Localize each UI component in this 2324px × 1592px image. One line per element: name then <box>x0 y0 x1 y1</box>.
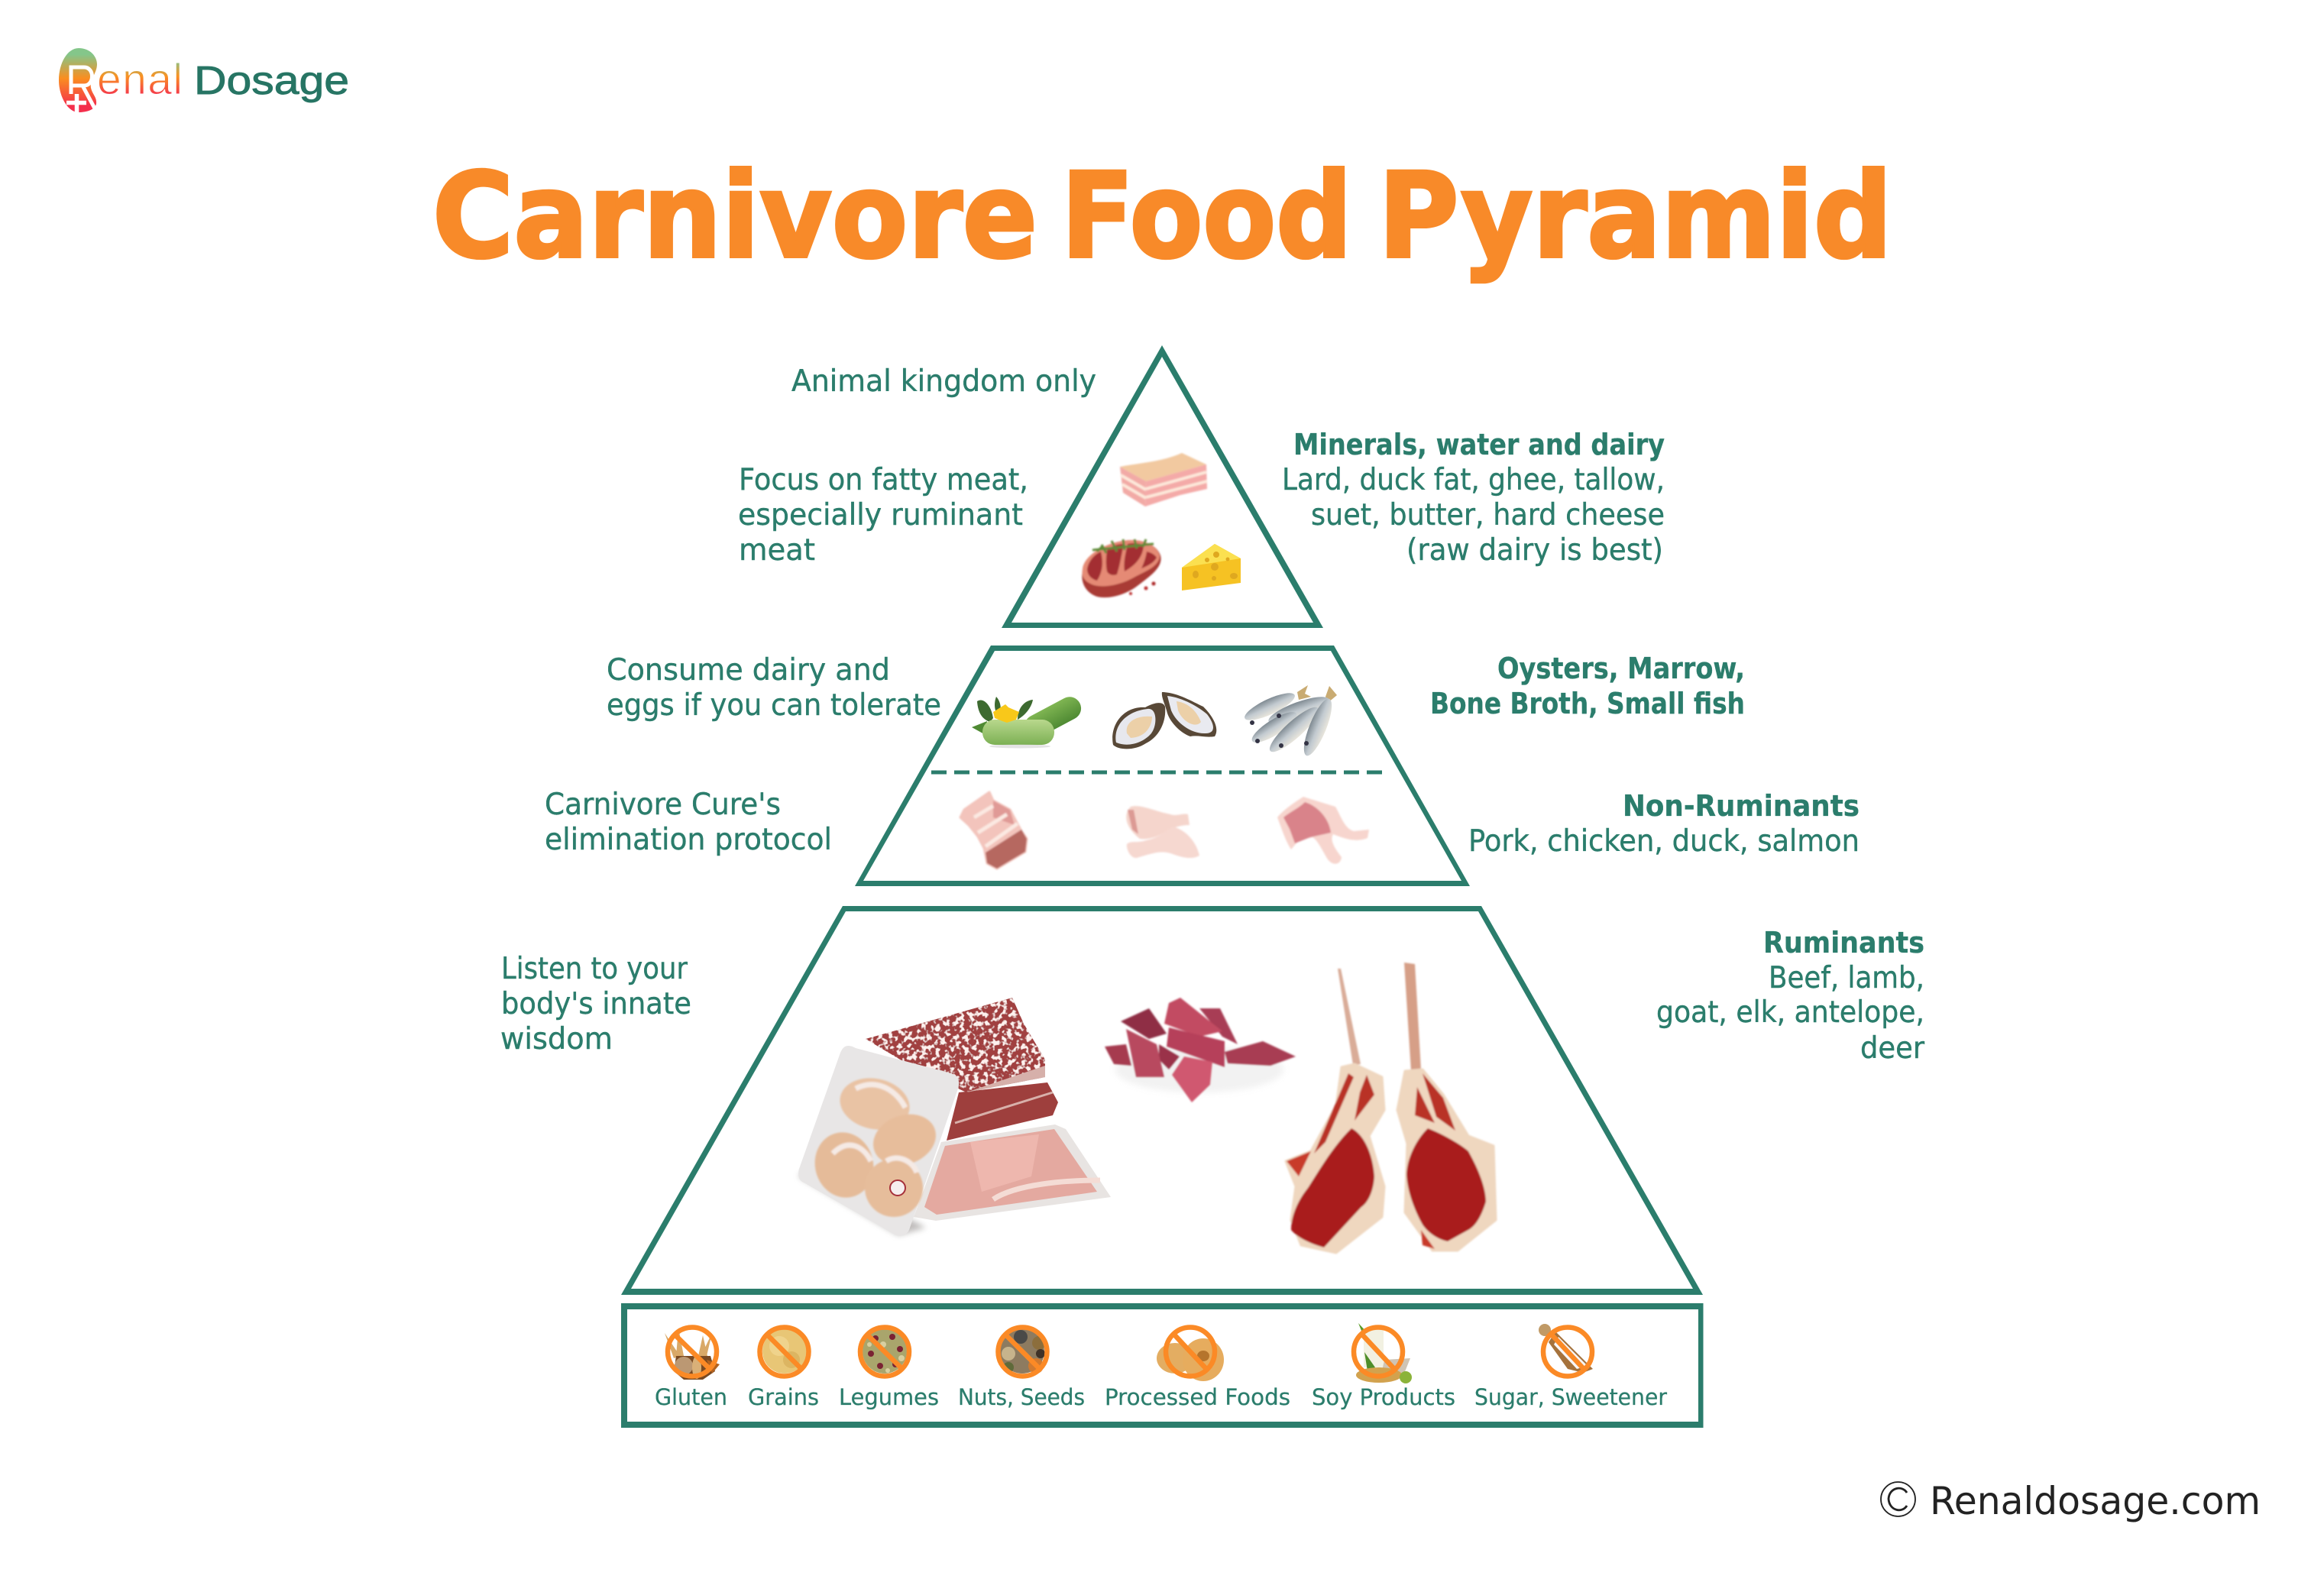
title: Carnivore <box>432 148 1037 285</box>
left note: elimination protocol <box>545 788 832 857</box>
avoid item: soy products <box>1312 1323 1455 1410</box>
right note: non-ruminants: Non-Ruminants <box>1623 789 1860 823</box>
footer copyright <box>1881 1479 2261 1523</box>
frozen chunks <box>808 1072 943 1217</box>
tier divider <box>931 770 1382 775</box>
food: pork belly <box>960 792 1027 869</box>
logo word: Dosage: Dosage <box>194 59 349 103</box>
right note: ruminants: goat, elk, antelope, <box>1656 995 1924 1030</box>
title <box>432 148 1892 285</box>
food: zucchini with flower <box>972 693 1085 749</box>
left note: fatty meat <box>738 463 1028 568</box>
avoid item: legumes <box>839 1328 939 1410</box>
label: Soy Products <box>1312 1384 1455 1410</box>
left note: innate wisdom: Listen to your <box>501 952 688 986</box>
left note: dairy and eggs: Consume dairy and <box>607 653 890 688</box>
label: Sugar, Sweetener <box>1474 1384 1667 1410</box>
avoid list frame <box>621 1303 1704 1428</box>
frozen block top <box>866 998 1045 1092</box>
left note: dairy and eggs <box>607 653 941 723</box>
avoid item: nuts and seeds <box>958 1328 1085 1410</box>
food: lamb chop right <box>1397 963 1496 1251</box>
pyramid tier: bottom trapezoid <box>621 906 1703 1295</box>
food: packaged frozen meat <box>798 998 1111 1236</box>
left note: fatty meat: meat <box>739 533 815 568</box>
right note: ruminants: deer <box>1860 1031 1925 1066</box>
left note: innate wisdom <box>500 952 691 1056</box>
left note: fatty meat: especially ruminant <box>738 498 1023 532</box>
label: Processed Foods <box>1105 1384 1290 1410</box>
right note: minerals, water and dairy: Lard, duck fat, ghee, tallow, <box>1282 463 1665 497</box>
right note: minerals, water and dairy: (raw dairy is best) <box>1406 533 1663 568</box>
left note: elimination protocol: Carnivore Cure's <box>545 788 781 822</box>
right note: non-ruminants <box>1468 789 1860 859</box>
right note: minerals, water and dairy <box>1282 428 1665 568</box>
food: duck leg <box>1277 797 1369 864</box>
right note: ruminants: Ruminants <box>1763 926 1924 959</box>
left note: fatty meat: Focus on fatty meat, <box>739 463 1028 497</box>
label: Gluten <box>655 1384 727 1410</box>
logo kidney mark <box>59 48 97 112</box>
right note: minerals, water and dairy: Minerals, water and dairy <box>1293 428 1665 461</box>
right note: ruminants: Beef, lamb, <box>1769 961 1924 995</box>
title: Pyramid <box>1378 148 1892 285</box>
logo: Renal Dosage <box>59 48 349 112</box>
upright tray <box>798 1046 959 1236</box>
left note: innate wisdom: wisdom <box>500 1022 613 1056</box>
right note: oysters, marrow <box>1430 652 1745 720</box>
label: Grains <box>748 1384 819 1410</box>
title: Food <box>1061 148 1352 285</box>
food: cheese wedge <box>1182 544 1241 591</box>
food: oysters <box>1112 692 1216 749</box>
avoid item: processed foods <box>1105 1328 1290 1410</box>
logo word: enal: enal <box>97 55 183 104</box>
pyramid tier: middle trapezoid <box>855 646 1470 886</box>
pyramid tier: top triangle <box>1002 345 1323 628</box>
copyright symbol <box>1881 1482 1915 1516</box>
bottom tray <box>914 1124 1111 1221</box>
right note: non-ruminants: Pork, chicken, duck, salmon <box>1468 824 1860 859</box>
food: bacon slab <box>1120 453 1207 506</box>
avoid item: grains <box>748 1328 819 1410</box>
food: steak with rosemary <box>1082 539 1161 597</box>
avoid item: gluten <box>655 1328 727 1410</box>
food: chicken drumsticks <box>1126 806 1199 858</box>
website: Renaldosage.com <box>1930 1479 2261 1523</box>
left note: innate wisdom: body's innate <box>501 987 691 1021</box>
left note: animal kingdom: Animal kingdom only <box>791 364 1096 399</box>
avoid item: sugar and sweetener <box>1474 1324 1667 1410</box>
right note: oysters, marrow: Bone Broth, Small fish <box>1430 687 1745 720</box>
label: Nuts, Seeds <box>958 1384 1085 1410</box>
right note: oysters, marrow: Oysters, Marrow, <box>1497 652 1745 685</box>
food: lamb chop left <box>1286 969 1384 1253</box>
food: small fish <box>1241 685 1337 759</box>
left note: dairy and eggs: eggs if you can tolerate <box>607 688 941 723</box>
label: Legumes <box>839 1384 939 1410</box>
right note: minerals, water and dairy: suet, butter, hard cheese <box>1311 498 1665 532</box>
left note: elimination protocol: elimination protocol <box>545 823 832 857</box>
food: meat cubes <box>1105 998 1296 1102</box>
right note: ruminants <box>1656 926 1925 1066</box>
